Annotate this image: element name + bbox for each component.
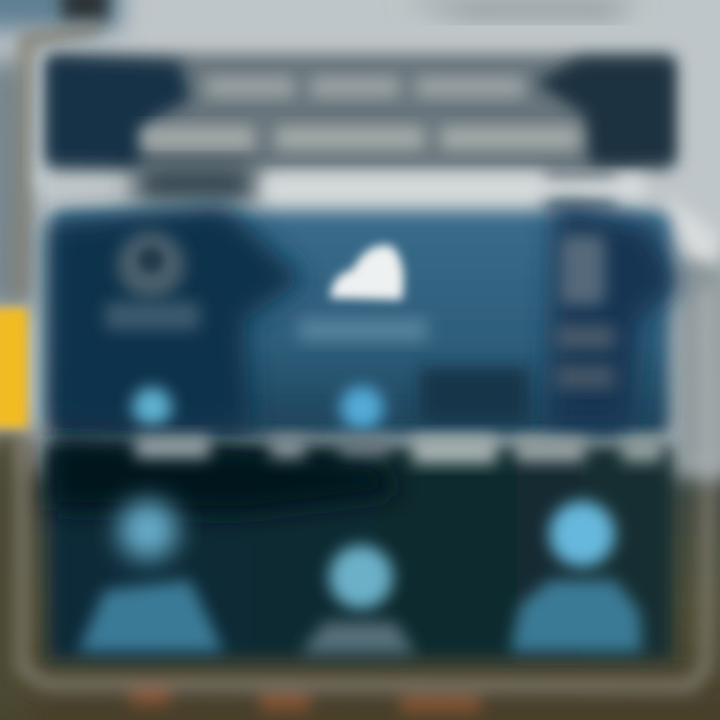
title line one [205, 76, 525, 98]
icon: left person figure [78, 500, 224, 652]
icon: right person figure [510, 501, 642, 652]
panel: center column [298, 245, 528, 430]
icon: center blue dot [340, 386, 384, 430]
header backdrop [50, 54, 670, 170]
left caption [105, 302, 200, 330]
panel: left column [48, 205, 305, 430]
panel: right column [550, 205, 682, 430]
icon: left circle [117, 231, 185, 299]
yellow side tab [0, 308, 28, 428]
bright band under header [265, 176, 645, 202]
left dark header panel [46, 56, 190, 166]
icon: left blue dot [132, 387, 172, 427]
center caption [298, 318, 428, 342]
icon: white cloud [330, 245, 404, 300]
dark stub below left panel [135, 165, 255, 201]
title line two [140, 126, 580, 150]
panel: lower dark section [45, 435, 673, 660]
dark stub below right panel [545, 170, 615, 210]
icon: right stacked marks [560, 235, 605, 305]
header band [46, 54, 676, 210]
dark chip [420, 368, 528, 422]
right dark header panel [535, 58, 676, 166]
panel: middle blue section [48, 205, 682, 437]
label strip [135, 436, 662, 464]
icon: center person figure [300, 545, 416, 654]
